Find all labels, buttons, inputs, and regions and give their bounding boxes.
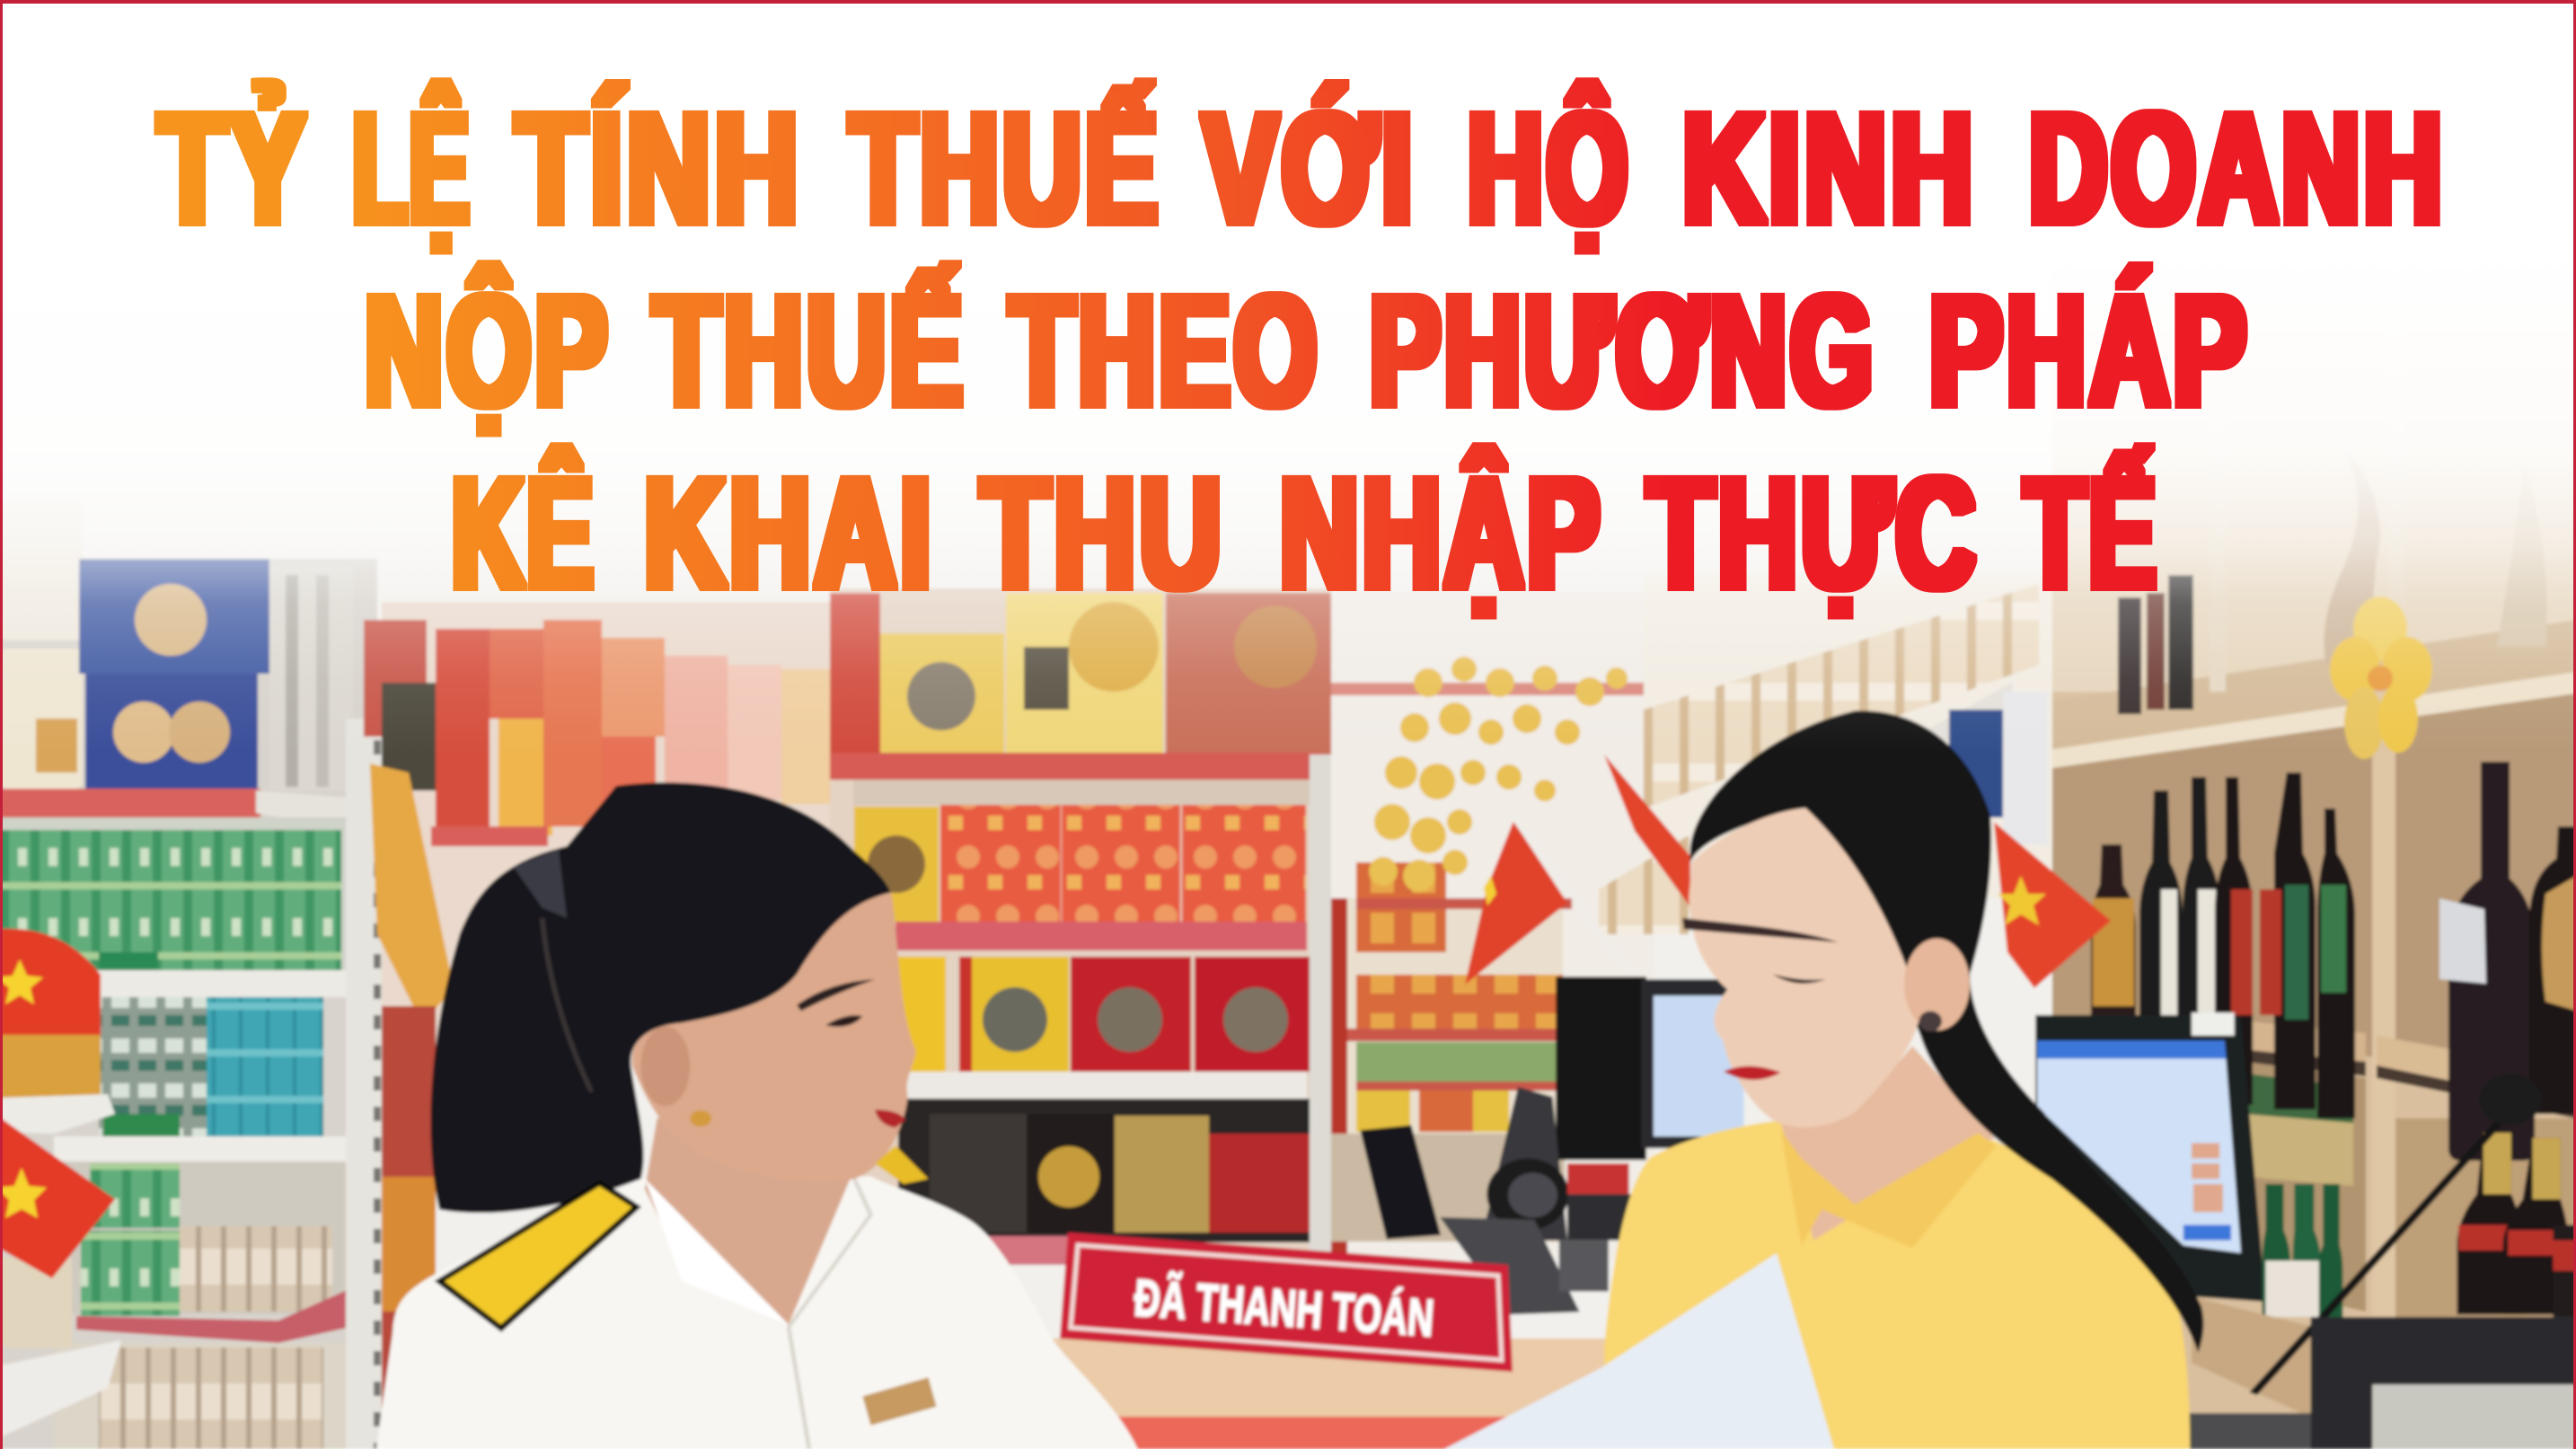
far back flags: [1465, 755, 2111, 988]
shirt collar and placket: [789, 1179, 870, 1449]
officer epaulettes: [439, 1183, 637, 1329]
champagne and soju bottles: [2263, 1133, 2576, 1317]
title line 1: TỶ: [158, 80, 309, 257]
title line 2: THEO: [1010, 263, 1320, 439]
left POS monitors, phone and scanner: [1360, 976, 1744, 1314]
table counter: [1042, 1339, 1635, 1449]
title line 1: HỘ: [1468, 81, 1631, 257]
white fade overlay at top of photo: [0, 0, 2576, 755]
title line 1: [158, 80, 2446, 257]
title line 1: LỆ: [353, 81, 472, 257]
back of store: blossom tree and shelves: [1331, 593, 1654, 1258]
lucky flower decoration: [2330, 596, 2432, 759]
title line 2: NỘP: [365, 263, 611, 439]
title line 1: KINH: [1682, 81, 1977, 257]
left upright column: [346, 719, 382, 1449]
sign text: ĐÃ THANH TOÁN: [1133, 1268, 1435, 1347]
title line 1: VỚI: [1203, 81, 1416, 257]
title line 1: THUẾ: [850, 80, 1161, 257]
title line 2: THUẾ: [653, 262, 966, 439]
title line 2: PHÁP: [1929, 263, 2250, 439]
flags and goods at far left: [0, 929, 121, 1437]
middle-left receding colourful shelves: [364, 602, 831, 1449]
woman hair: [1689, 711, 2203, 1353]
tax officer woman: [376, 782, 1138, 1449]
title line 3: [452, 445, 2159, 622]
right POS monitor: [2035, 1012, 2265, 1302]
title line 3: KÊ: [452, 446, 596, 622]
title line 3: THU: [981, 446, 1225, 622]
officer name badge: [862, 1377, 937, 1426]
officer hair: [431, 782, 891, 1213]
title line 3: NHẬP: [1280, 446, 1603, 622]
title line 3: KHAI: [644, 446, 935, 622]
title line 3: TẾ: [2025, 445, 2159, 622]
title: three gradient lines: [158, 80, 2446, 622]
yellow shirt collar: [1781, 1130, 1996, 1248]
woman in yellow shirt: [1604, 711, 2203, 1449]
wine bottles: [2091, 762, 2576, 1161]
right wooden wine shelves: [2052, 269, 2576, 1449]
title line 1: TÍNH: [516, 81, 802, 257]
title line 3: THỰC: [1647, 446, 1979, 622]
sign: đã thanh toán: [1060, 1233, 1513, 1372]
sheet of paper: [1444, 1253, 1834, 1449]
upper right receding shelves: [1599, 575, 2057, 934]
title line 2: PHƯƠNG: [1370, 263, 1876, 439]
left shelf unit: [0, 501, 377, 1449]
centre shelf with boxed goods: [830, 588, 1331, 1265]
counter shelf, microphone and register screen: [2183, 1074, 2576, 1449]
upper bottles and sculpture: [2118, 449, 2547, 714]
title line 2: [365, 262, 2250, 439]
blossom clusters: [1369, 657, 1628, 892]
